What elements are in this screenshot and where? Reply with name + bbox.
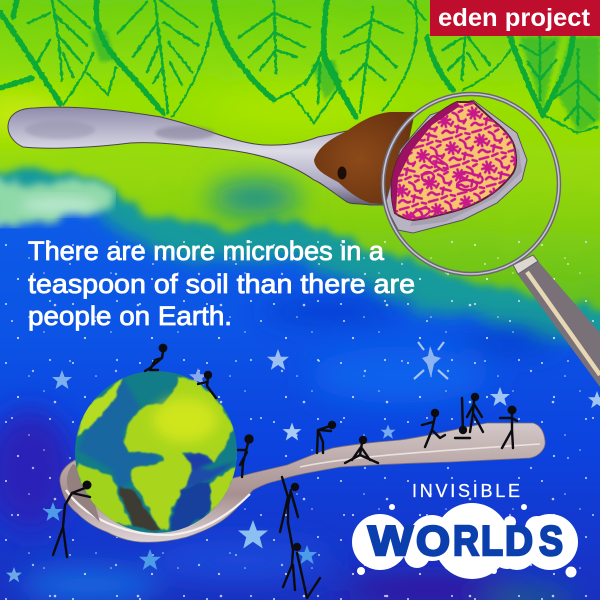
figure sitting on handle xyxy=(345,437,378,463)
spoon rim xyxy=(385,100,527,233)
figure climbing spoon bowl xyxy=(53,482,90,557)
running figure xyxy=(422,410,445,447)
main text: people on Earth. xyxy=(28,301,232,331)
handle xyxy=(513,255,600,387)
cloud shapes xyxy=(352,503,578,579)
figure hanging from spoon xyxy=(280,477,298,532)
worlds wordmark: L xyxy=(481,517,503,564)
ocean shadows xyxy=(78,380,233,489)
top spoon xyxy=(8,107,415,205)
worlds wordmark: S xyxy=(539,517,563,564)
dark blue south xyxy=(170,480,210,532)
large star with rays xyxy=(414,342,448,379)
brown south xyxy=(118,487,160,530)
earth xyxy=(75,371,237,533)
worlds wordmark: D xyxy=(505,517,533,564)
microbe close-up xyxy=(392,102,516,220)
stick figures xyxy=(53,345,517,598)
main text xyxy=(28,236,415,331)
magnifying glass xyxy=(383,94,600,387)
figure hanging lower xyxy=(283,523,320,598)
bottom spoon xyxy=(60,423,545,542)
main text: teaspoon of soil than there are xyxy=(28,269,415,299)
invisible label: INVISIBLE xyxy=(412,481,520,501)
figure at end of handle xyxy=(500,407,517,448)
worlds wordmark xyxy=(368,517,563,564)
figure pushing globe xyxy=(198,372,216,398)
continents xyxy=(77,377,237,530)
figure sitting on top of earth xyxy=(145,345,166,371)
invisible worlds logo xyxy=(352,481,578,579)
lens ring xyxy=(383,94,559,274)
blue stars xyxy=(6,342,600,582)
eden project banner: eden project xyxy=(438,4,591,32)
worlds wordmark: R xyxy=(453,517,479,564)
lens contents xyxy=(385,100,527,233)
kneeling figure and post xyxy=(455,398,470,438)
spoon handle and bowl xyxy=(8,107,400,205)
standing figure xyxy=(467,394,483,432)
figure on earth side xyxy=(238,436,252,477)
worlds wordmark: W xyxy=(368,517,413,564)
main text: There are more microbes in a xyxy=(28,236,384,266)
eden project banner xyxy=(430,0,600,36)
leaf outlines xyxy=(0,0,573,117)
figure leaning on handle xyxy=(317,422,335,453)
leaves along the top xyxy=(0,0,600,133)
teaspoon of soil xyxy=(314,112,415,205)
dense leaf shading xyxy=(90,30,600,133)
pale watercolour wash xyxy=(0,176,110,226)
leaf veins xyxy=(28,0,600,125)
worlds wordmark: O xyxy=(416,517,450,564)
